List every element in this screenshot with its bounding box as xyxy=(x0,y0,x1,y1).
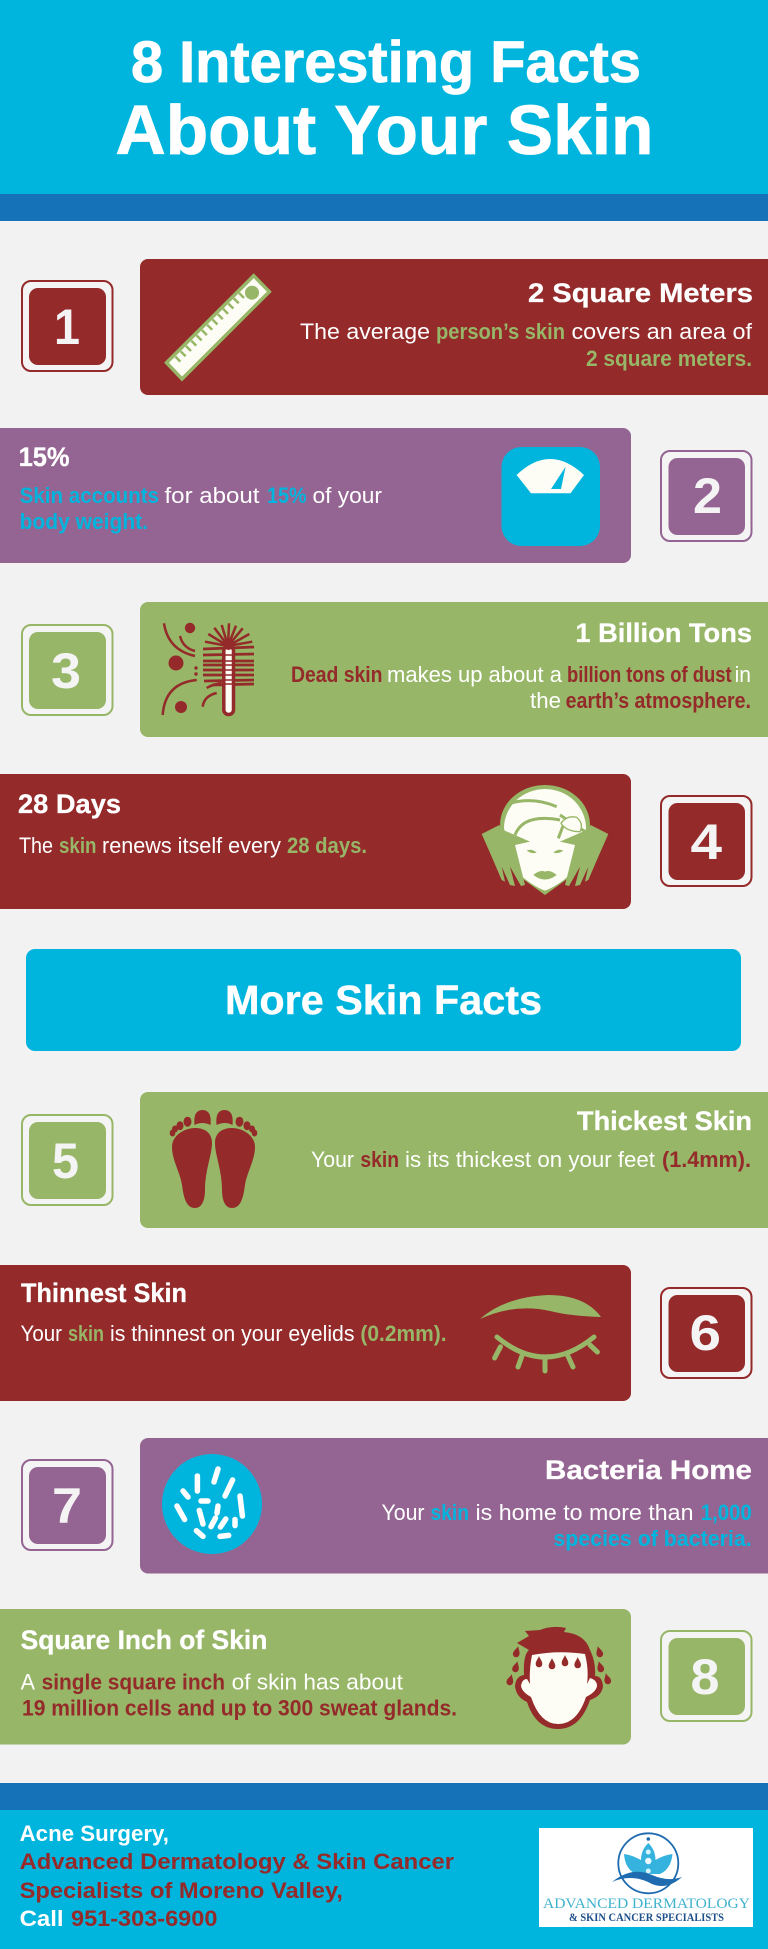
heading: Thickest Skin xyxy=(577,1106,752,1136)
number badge 1: 1 xyxy=(54,299,80,355)
body text xyxy=(20,483,382,534)
panel: fact 3, 1 billion tons xyxy=(140,602,768,737)
contact text xyxy=(20,1821,454,1931)
logo: ADVANCED DERMATOLOGY xyxy=(543,1896,750,1912)
panel: fact 2, 15 percent xyxy=(0,428,631,563)
header band xyxy=(0,0,768,221)
body text: in xyxy=(735,662,751,687)
number badge 8 xyxy=(661,1631,752,1721)
icon: sweating head xyxy=(506,1627,612,1729)
section banner: more skin facts: More Skin Facts xyxy=(225,977,542,1023)
body text: covers an area of xyxy=(572,319,753,344)
icon: ruler xyxy=(166,276,269,379)
number badge 4 xyxy=(661,796,752,886)
number badge 7: 7 xyxy=(52,1478,82,1534)
number badge 3 xyxy=(22,625,112,715)
body text: of your xyxy=(312,483,382,508)
icon: brush and dust xyxy=(163,623,254,715)
body text: 15% xyxy=(267,483,306,508)
heading: 28 Days xyxy=(18,789,121,819)
body text: 2 square meters. xyxy=(586,346,752,371)
body text: 1,000 xyxy=(701,1500,752,1525)
body text: Your xyxy=(20,1321,62,1346)
title: About Your Skin xyxy=(116,91,654,169)
heading: 15% xyxy=(19,442,70,472)
panel: fact 1, 2 square meters xyxy=(140,259,768,395)
body text: skin xyxy=(68,1321,104,1346)
body text: Your xyxy=(382,1500,424,1525)
panel: fact 4, 28 days xyxy=(0,774,631,909)
icon: weighing scale xyxy=(502,447,600,546)
body text: 19 million cells and up to 300 sweat glands. xyxy=(22,1696,457,1720)
body text: billion tons of dust xyxy=(567,662,732,687)
number badge 5: 5 xyxy=(52,1133,79,1189)
contact text: Call xyxy=(20,1906,64,1931)
body text xyxy=(382,1500,752,1551)
section banner: more skin facts xyxy=(26,949,741,1051)
body text: earth’s atmosphere. xyxy=(566,688,751,713)
body text xyxy=(291,662,751,713)
icon: feet xyxy=(170,1110,257,1208)
number badge 7 xyxy=(22,1460,112,1550)
body text: is thinnest on your eyelids xyxy=(110,1321,354,1346)
number badge 2: 2 xyxy=(693,468,722,524)
number badge 4: 4 xyxy=(690,814,722,870)
body text: The average xyxy=(300,319,430,344)
body text xyxy=(20,1321,447,1346)
body text: 28 days. xyxy=(287,833,367,858)
body text: single square inch xyxy=(42,1670,225,1694)
heading: Bacteria Home xyxy=(545,1455,752,1485)
body text xyxy=(19,833,367,858)
body text: The xyxy=(19,833,53,858)
icon: closed eye xyxy=(480,1295,601,1371)
body text: body weight. xyxy=(20,509,148,534)
number badge 5 xyxy=(22,1115,112,1205)
heading: Thinnest Skin xyxy=(21,1278,187,1308)
contact text: 951-303-6900 xyxy=(71,1906,217,1931)
number badge 6: 6 xyxy=(690,1305,721,1361)
number badge 2 xyxy=(661,451,752,541)
contact text: Advanced Dermatology & Skin Cancer xyxy=(20,1849,454,1874)
panel: fact 5, thickest skin xyxy=(140,1092,768,1228)
body text: (1.4mm). xyxy=(662,1147,751,1172)
body text xyxy=(311,1147,751,1172)
body text: person’s skin xyxy=(436,319,565,344)
body text: species of bacteria. xyxy=(553,1526,752,1551)
number badge 6 xyxy=(661,1288,752,1378)
body text: Skin accounts xyxy=(20,483,159,508)
icon: bacteria circle xyxy=(162,1454,262,1554)
body text: skin xyxy=(59,833,96,858)
heading: 2 Square Meters xyxy=(528,278,753,308)
title: 8 Interesting Facts xyxy=(131,30,641,95)
body text xyxy=(300,319,753,371)
body text: Dead skin xyxy=(291,662,382,687)
body text: for about xyxy=(164,483,260,508)
body text: is home to more than xyxy=(476,1500,694,1525)
body text: makes up about a xyxy=(387,662,563,687)
heading: Square Inch of Skin xyxy=(21,1625,267,1655)
footer band xyxy=(0,1783,768,1949)
heading: 1 Billion Tons xyxy=(575,618,752,648)
body text: skin xyxy=(430,1500,469,1525)
body text: A xyxy=(21,1670,35,1694)
number badge 3: 3 xyxy=(51,643,81,699)
logo xyxy=(539,1828,753,1927)
panel: fact 7, bacteria home xyxy=(140,1438,768,1574)
title xyxy=(116,30,654,169)
body text: the xyxy=(530,688,561,713)
body text: (0.2mm). xyxy=(360,1321,447,1346)
body text: renews itself every xyxy=(102,833,281,858)
body text xyxy=(21,1670,457,1720)
body text: Your xyxy=(311,1147,354,1172)
number badge 8: 8 xyxy=(690,1649,720,1705)
body text: is its thickest on your feet xyxy=(405,1147,655,1172)
body text: skin xyxy=(360,1147,399,1172)
body text: of skin has about xyxy=(232,1670,403,1694)
panel: fact 8, square inch of skin xyxy=(0,1609,631,1744)
number badge 1 xyxy=(22,281,112,371)
icon: face with hands xyxy=(482,785,608,895)
logo: & SKIN CANCER SPECIALISTS xyxy=(569,1912,724,1924)
contact text: Acne Surgery, xyxy=(20,1821,169,1846)
panel: fact 6, thinnest skin xyxy=(0,1265,631,1401)
contact text: Specialists of Moreno Valley, xyxy=(20,1878,343,1903)
